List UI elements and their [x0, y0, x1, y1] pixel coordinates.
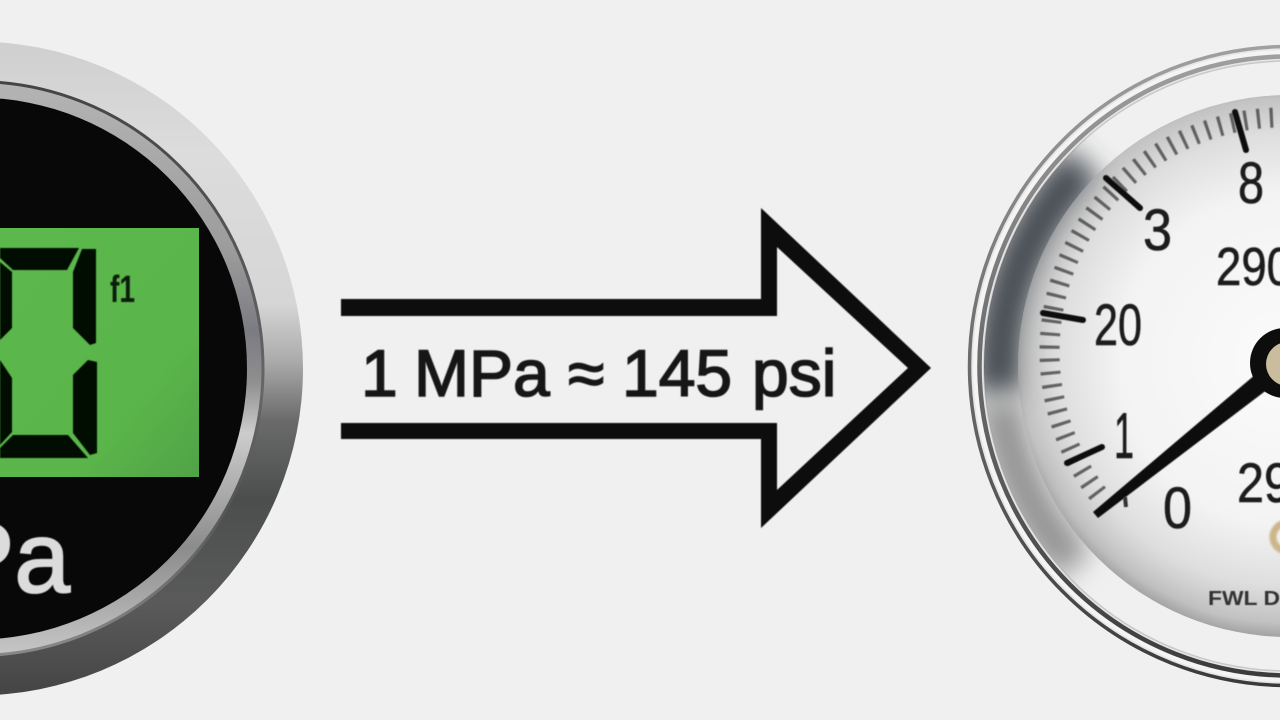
needle tail mark — [1125, 497, 1126, 507]
conversion text: ≈ — [568, 336, 604, 410]
analog gauge numerals: 0 — [1163, 476, 1192, 541]
needle hub — [1250, 328, 1280, 398]
conversion arrow — [341, 208, 931, 528]
analog gauge face — [1018, 95, 1280, 637]
digital gauge black face — [0, 98, 247, 640]
analog gauge numerals: 8 — [1238, 151, 1264, 216]
conversion text: MPa — [414, 336, 550, 410]
LCD small unit mark: f1 — [110, 269, 135, 311]
digital gauge bezel — [0, 42, 303, 696]
digital gauge — [0, 42, 303, 696]
brass screw — [1273, 523, 1280, 551]
analog gauge fine print: FWL D — [1208, 588, 1280, 610]
analog gauge needle — [1093, 374, 1268, 518]
analog gauge numerals — [1094, 151, 1280, 541]
face edge shadow — [1018, 168, 1105, 401]
conversion text: 1 — [361, 336, 398, 410]
conversion text: psi — [752, 336, 836, 410]
digital gauge inner ring — [0, 82, 263, 656]
conversion text: 145 — [622, 336, 732, 410]
analog gauge numerals: 20 — [1094, 293, 1142, 358]
LCD digit zero — [0, 248, 97, 458]
analog gauge bezel — [970, 46, 1280, 686]
analog gauge — [970, 46, 1280, 686]
green LCD screen — [0, 228, 199, 477]
arrow outline — [341, 208, 931, 528]
analog gauge minor ticks — [1050, 117, 1280, 494]
analog gauge numerals: 3 — [1143, 198, 1172, 263]
analog gauge major ticks — [1043, 112, 1246, 463]
hub centre — [1266, 342, 1280, 386]
analog gauge numerals: 1 — [1114, 399, 1134, 472]
